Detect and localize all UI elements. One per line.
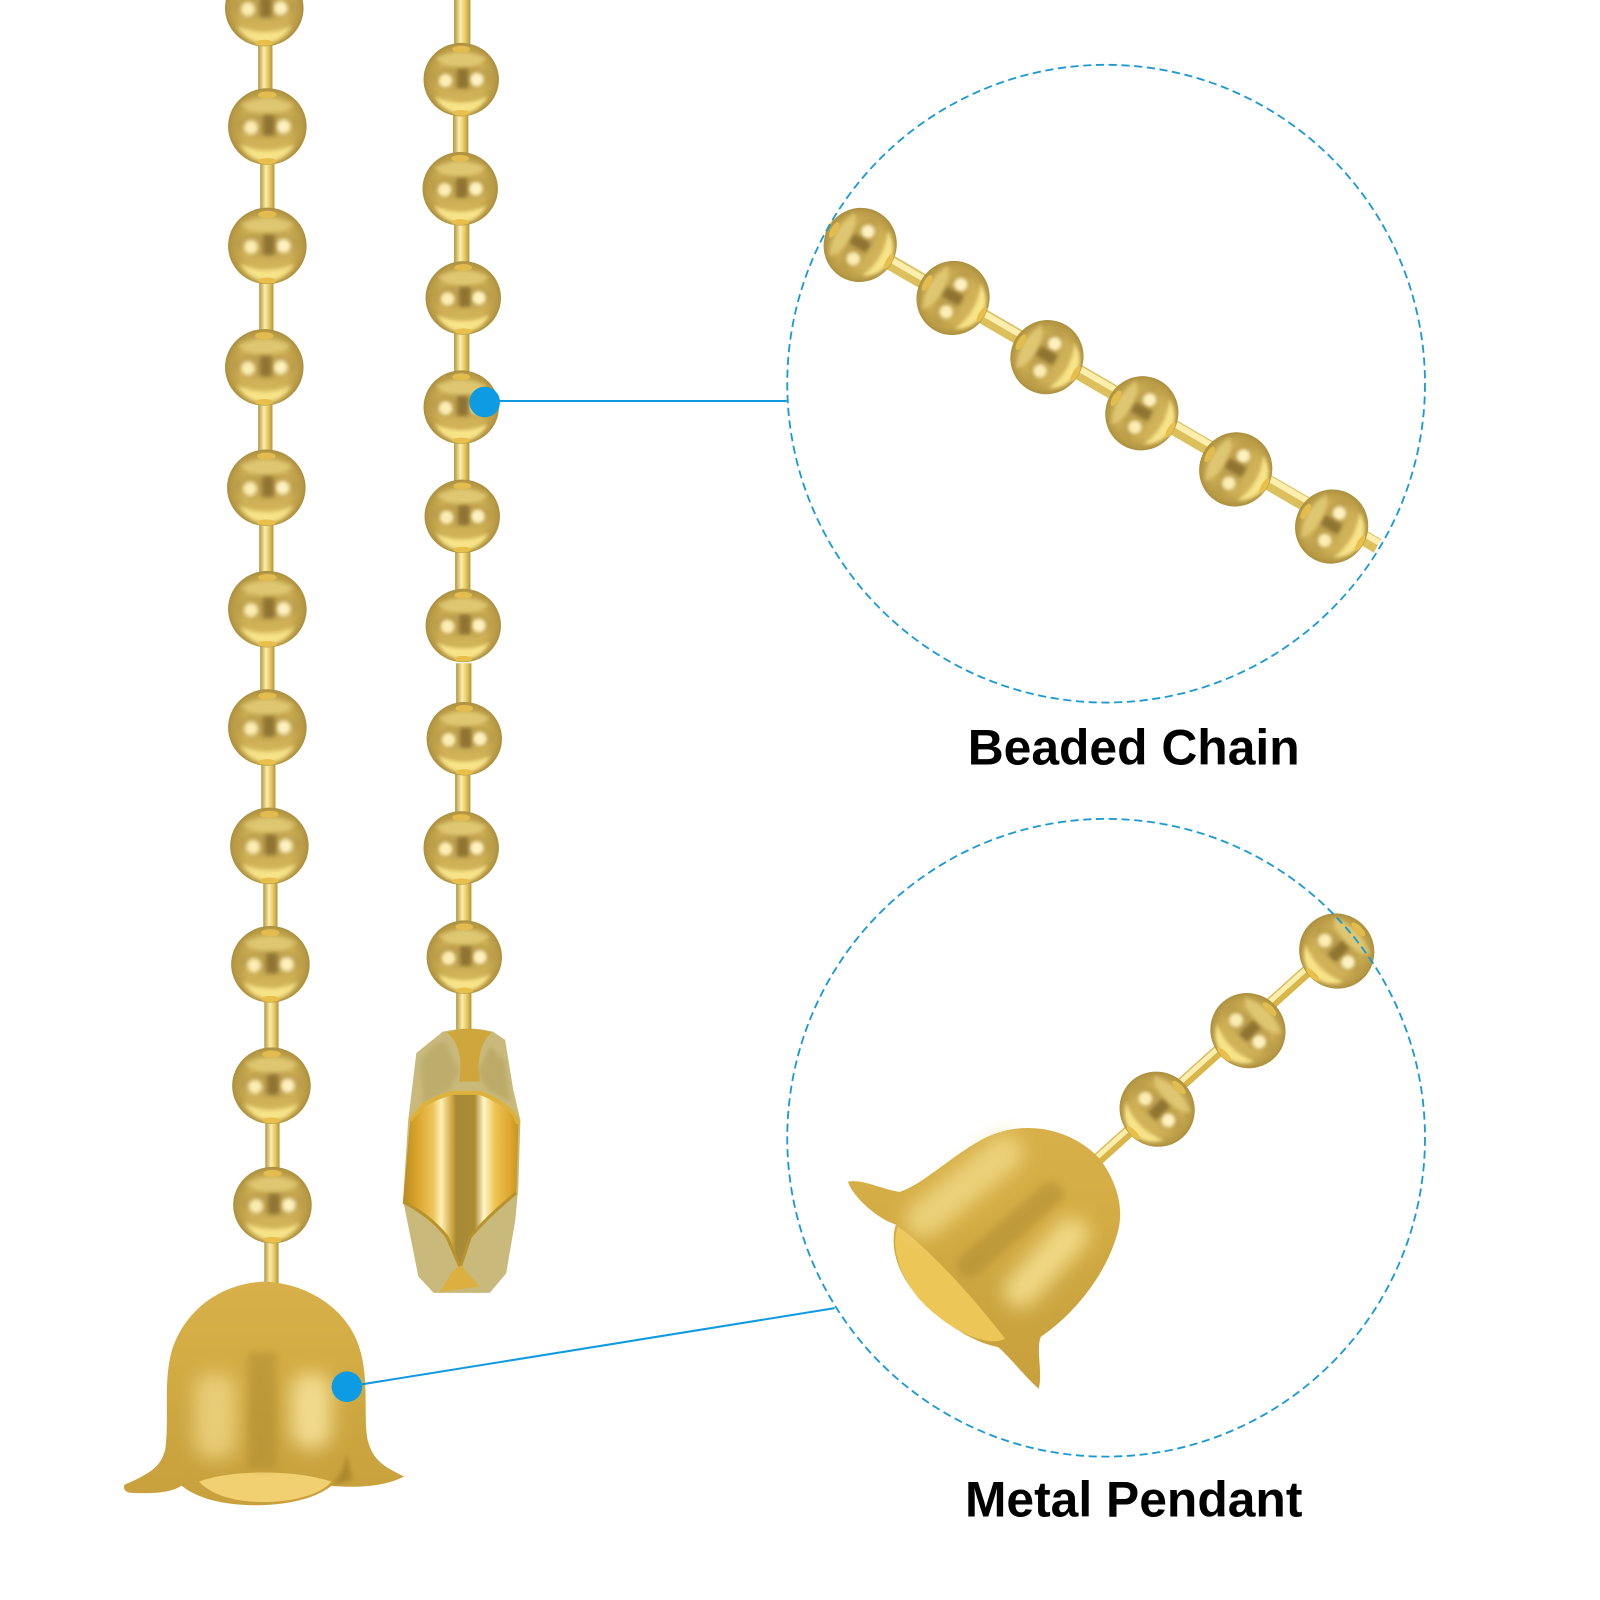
callout: metal pendant circle [787, 819, 1425, 1457]
chain connector clasp [403, 1029, 520, 1293]
magnified chain beads [810, 194, 1382, 577]
chain rods [453, 0, 471, 1041]
leader line and dot: beaded chain [469, 387, 787, 417]
short beaded chain [422, 0, 502, 1041]
magnified chain rods [1097, 946, 1332, 1160]
label: Beaded Chain: Beaded Chain [968, 719, 1300, 775]
callout: beaded chain circle [787, 65, 1425, 703]
leader line and dot: metal pendant [332, 1308, 835, 1402]
dashed circle [787, 65, 1425, 703]
magnified chain rods [829, 223, 1380, 546]
magnified chain beads [1104, 898, 1390, 1162]
long beaded chain [225, 0, 312, 1288]
label: Metal Pendant: Metal Pendant [965, 1471, 1302, 1527]
dashed circle [787, 819, 1425, 1457]
metal pendant bell [124, 1282, 404, 1505]
chain beads [225, 0, 312, 1243]
chain beads [422, 43, 502, 994]
magnified bell [848, 1128, 1120, 1389]
chain rods [258, 41, 280, 1288]
